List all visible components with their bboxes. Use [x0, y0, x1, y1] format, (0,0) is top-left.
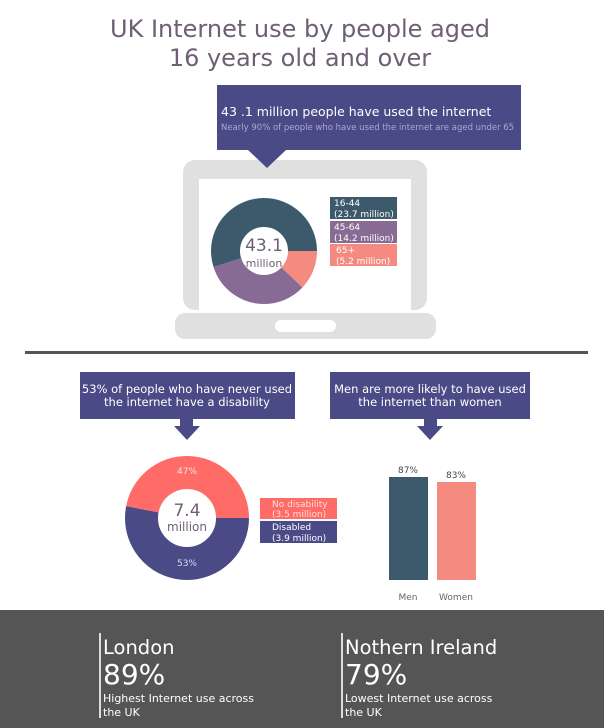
- stat: London: [99, 633, 254, 719]
- bar chart: gender: Men: [398, 593, 418, 603]
- stat: London: the UK: [103, 706, 141, 719]
- legend: disability: (3.5 million): [272, 510, 326, 520]
- donut chart: disability: million: [167, 520, 207, 534]
- bar chart: gender: Women: [439, 593, 473, 603]
- callout: 43.1 million: [217, 85, 521, 168]
- legend: disability: (3.9 million): [272, 534, 326, 544]
- bar chart: gender: 87%: [398, 466, 418, 476]
- stat: Northern Ireland: Lowest Internet use across: [345, 692, 493, 705]
- legend: age groups: 65+: [336, 246, 355, 256]
- callout: disability: [80, 372, 295, 440]
- legend: age groups: (14.2 million): [334, 234, 394, 244]
- legend: disability: [260, 498, 337, 544]
- stat: Northern Ireland: the UK: [345, 706, 383, 719]
- legend: age groups: (5.2 million): [336, 257, 390, 267]
- callout: disability: 53% of people who have never used: [82, 382, 292, 396]
- bar chart: gender: 83%: [446, 471, 466, 481]
- stat: London: 89%: [103, 658, 165, 691]
- laptop icon: [175, 160, 436, 339]
- callout: 43.1 million: Nearly 90% of people who have used the internet are aged under 65: [221, 123, 514, 133]
- stat: Northern Ireland: [341, 633, 497, 719]
- donut chart: disability: [142, 467, 232, 569]
- stat: London: Highest Internet use across: [103, 692, 254, 705]
- stat: Northern Ireland: 79%: [345, 658, 407, 691]
- footer panel: [0, 610, 604, 728]
- callout: gender: the internet than women: [358, 395, 502, 409]
- legend: age groups: (23.7 million): [334, 210, 394, 220]
- bar chart: gender: [389, 466, 476, 603]
- title: 16 years old and over: [169, 44, 431, 72]
- title: [110, 15, 490, 72]
- callout: 43.1 million: 43 .1 million people have used the internet: [221, 104, 491, 119]
- legend: age groups: [330, 197, 397, 267]
- legend: age groups: 16-44: [334, 199, 360, 209]
- callout: gender: [330, 372, 530, 440]
- callout: gender: Men are more likely to have used: [334, 382, 526, 396]
- donut chart: age groups: million: [246, 257, 282, 270]
- donut chart: age groups: [226, 212, 302, 290]
- callout: disability: the internet have a disability: [104, 395, 270, 409]
- legend: disability: No disability: [272, 500, 328, 510]
- legend: disability: Disabled: [272, 523, 311, 533]
- donut chart: disability: 53%: [177, 559, 197, 569]
- stat: London: London: [103, 636, 174, 659]
- donut chart: disability: 7.4: [173, 501, 201, 521]
- donut chart: disability: 47%: [177, 467, 197, 477]
- title: UK Internet use by people aged: [110, 15, 490, 43]
- donut chart: age groups: 43.1: [245, 236, 283, 256]
- stat: Northern Ireland: Nothern Ireland: [345, 636, 497, 659]
- legend: age groups: 45-64: [334, 223, 360, 233]
